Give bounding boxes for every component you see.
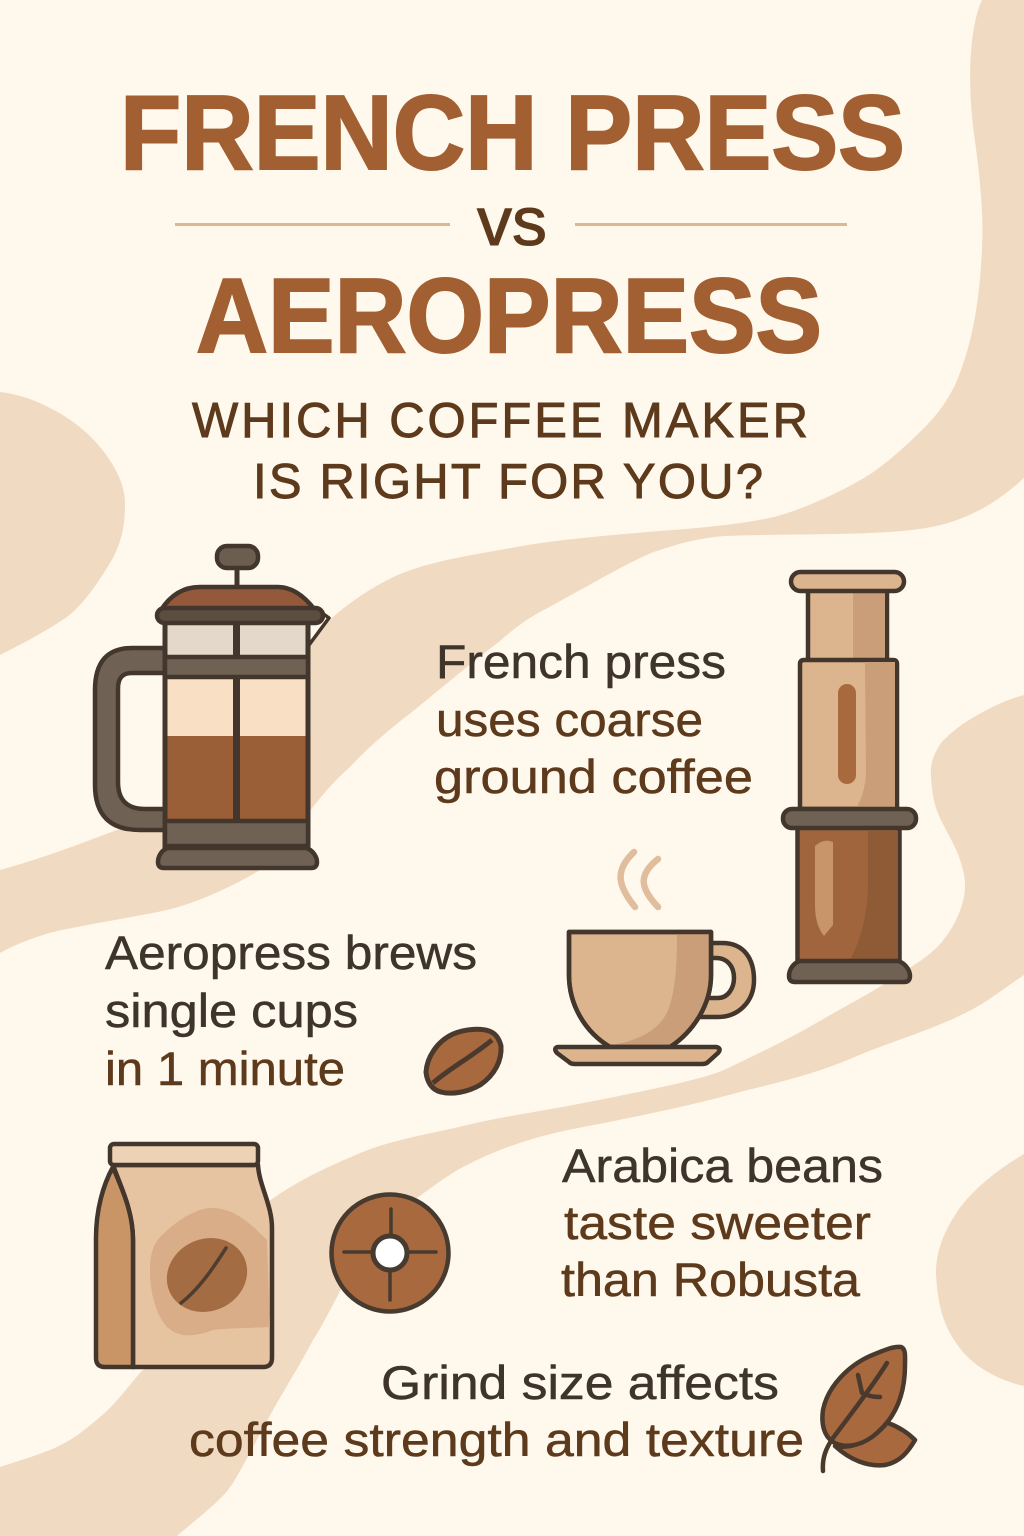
background wave: upper band: [0, 0, 1024, 953]
bag side gusset: [96, 1167, 133, 1367]
press knob: [217, 546, 258, 568]
text: french press grind: uses coarse: [436, 693, 703, 746]
cup bowl: [569, 932, 711, 1047]
icon: coffee cup: [555, 932, 754, 1064]
text: arabica beans: [561, 1139, 883, 1306]
aeropress collar: [783, 809, 916, 828]
icon: coffee bag: [96, 1144, 272, 1367]
press glass and coffee: [165, 620, 308, 848]
text: french press grind: French press: [436, 635, 726, 688]
press spout: [309, 610, 329, 645]
press plunger rod: [234, 566, 240, 588]
icon: coffee leaf: [822, 1347, 915, 1471]
text: aeropress speed: Aeropress brews: [105, 926, 477, 979]
subtitle: IS RIGHT FOR YOU?: [253, 455, 763, 509]
text: grind size: [189, 1356, 804, 1466]
press lid rim: [157, 608, 323, 623]
leaf veins and stem: [823, 1363, 887, 1471]
text: arabica beans: than Robusta: [561, 1253, 861, 1306]
bag bean: [155, 1225, 259, 1325]
title: French Press: FRENCH PRESS: [120, 74, 905, 192]
background wave: lower band: [0, 695, 1024, 1536]
press base: [158, 848, 317, 868]
aeropress chamber: [800, 660, 897, 809]
background blob: lower right: [936, 1154, 1024, 1386]
small leaf: [835, 1422, 915, 1465]
aeropress top cap: [791, 572, 904, 591]
icon: french press: [95, 546, 329, 868]
subtitle: [192, 394, 808, 509]
cup handle: [696, 943, 754, 1017]
text: aeropress speed: [105, 926, 477, 1095]
press handle: [95, 648, 166, 830]
text: grind size: Grind size affects: [381, 1356, 779, 1409]
text: french press grind: [434, 635, 753, 803]
press lid: [161, 587, 315, 610]
text: aeropress speed: single cups: [105, 984, 358, 1037]
saucer: [555, 1047, 720, 1064]
vs divider: vs: [477, 183, 547, 260]
bag label blob: [150, 1208, 270, 1335]
icon: steam: [621, 852, 658, 907]
subtitle: WHICH COFFEE MAKER: [192, 394, 808, 448]
aeropress base: [789, 961, 910, 982]
icon: aeropress: [783, 572, 916, 982]
title: Aeropress: AEROPRESS: [196, 257, 822, 375]
aeropress plunger: [808, 590, 887, 661]
press middle band: [165, 657, 308, 677]
text: french press grind: ground coffee: [434, 750, 753, 803]
bag body: [113, 1165, 272, 1367]
press bottom band: [165, 821, 308, 846]
large leaf: [822, 1347, 905, 1446]
text: arabica beans: Arabica beans: [562, 1139, 883, 1192]
bag top fold: [110, 1144, 258, 1165]
text: arabica beans: taste sweeter: [564, 1196, 871, 1249]
aeropress lower tube: [798, 827, 900, 962]
background blob: left: [0, 392, 125, 655]
text: aeropress speed: in 1 minute: [105, 1042, 345, 1095]
icon: coffee bean: [426, 1029, 501, 1093]
icon: grinder burr: [332, 1194, 448, 1312]
text: grind size: coffee strength and texture: [189, 1413, 804, 1466]
